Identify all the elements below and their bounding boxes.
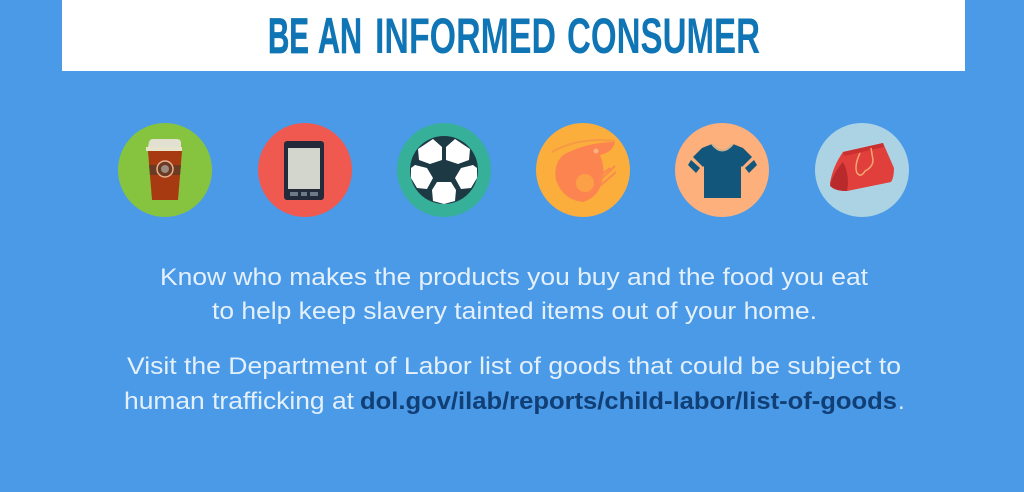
text block: visit the department of labor: human trafficking at xyxy=(124,388,354,415)
icon: shrimp xyxy=(536,123,630,217)
link text: dol.gov/ilab/reports/child-labor/list-of-goods xyxy=(360,388,897,415)
text block: visit the department of labor: . xyxy=(898,388,905,415)
title: INFORMED xyxy=(375,8,556,64)
icon: soccer ball xyxy=(397,123,491,217)
text block: visit the department of labor xyxy=(124,353,905,415)
icon: t-shirt xyxy=(675,123,769,217)
text block: visit the department of labor: Visit the Department of Labor list of goods that could be subject to xyxy=(127,353,901,380)
title: BE xyxy=(268,8,309,64)
title: CONSUMER xyxy=(567,8,760,64)
icon: red handbag xyxy=(815,123,909,217)
text block: know who makes the products: to help keep slavery tainted items out of your home. xyxy=(212,298,817,325)
title xyxy=(268,8,760,64)
text block: know who makes the products: Know who makes the products you buy and the food you eat xyxy=(160,264,868,291)
icon: coffee cup xyxy=(118,123,212,217)
title banner xyxy=(62,0,965,71)
icon: tablet xyxy=(258,123,352,217)
text block: know who makes the products xyxy=(160,264,868,325)
title: AN xyxy=(318,8,362,64)
